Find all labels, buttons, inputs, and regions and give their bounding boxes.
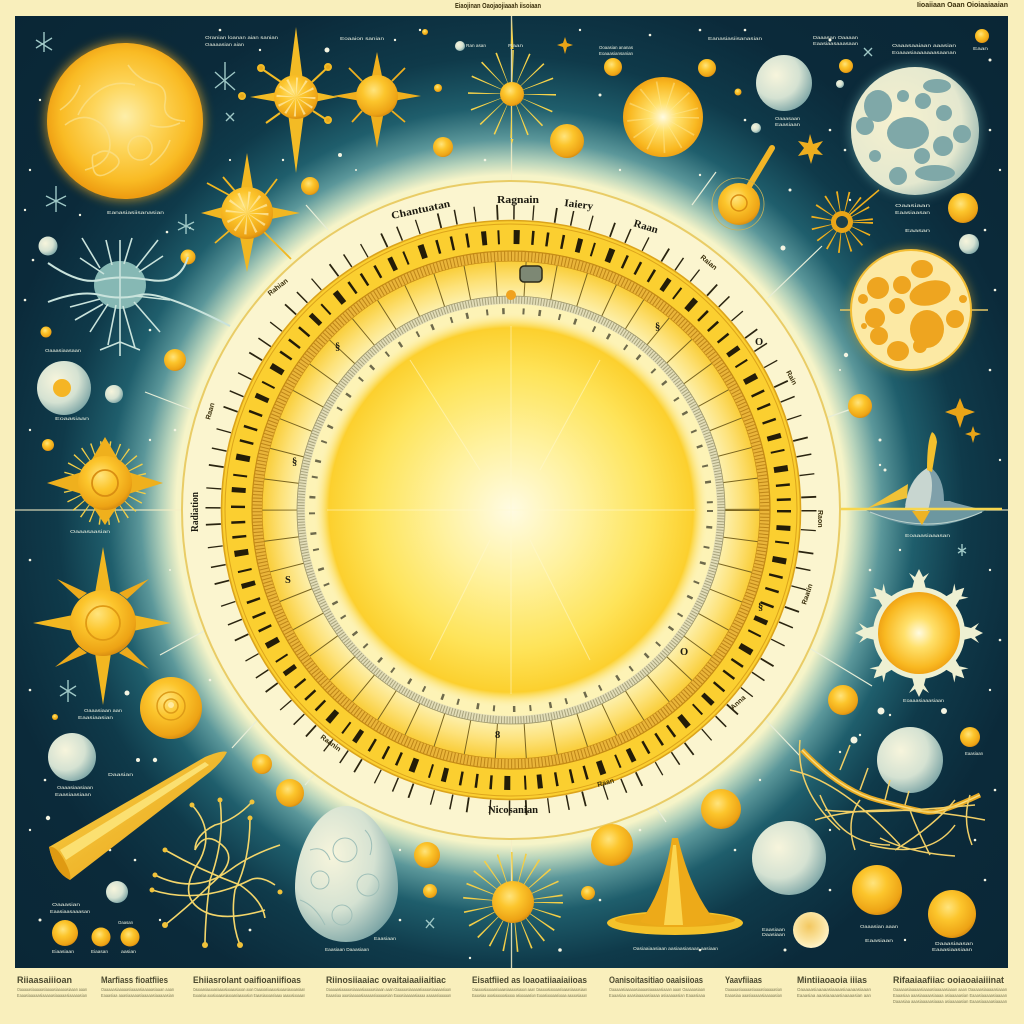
starburst right — [822, 190, 879, 242]
dial: glyph marks: § — [335, 342, 340, 353]
dial: ring labels: Raon — [816, 510, 823, 528]
top captions: Eiaojinan Oaojaojiaaah iisoiaan — [455, 3, 541, 10]
balls bottom left — [52, 881, 140, 946]
gold comet probe — [712, 148, 772, 230]
small labels in space: Oranian loanan aian sanian — [205, 35, 279, 40]
small labels in space: Eaasiaan — [865, 938, 894, 943]
small labels in space: Oaasiaan — [895, 203, 931, 208]
dial: hatched band — [252, 251, 770, 769]
dial: outer cream ring — [182, 181, 840, 839]
caption 5 — [472, 975, 587, 998]
small labels in space: Eiaasiaan — [52, 949, 74, 954]
planet orange lower left — [140, 677, 202, 739]
small labels in space: Ooaasian ananas — [599, 45, 634, 50]
caption 5: Eisatfiied as Ioaoatiiaaiaiioas — [472, 975, 587, 986]
small labels in space: Oaaasaasian — [70, 529, 111, 534]
small labels in space: Eaasiaasan — [895, 210, 931, 215]
dial: black scale marks — [238, 237, 784, 783]
caption 5: Eaaasiaa aaasiaaaaasiaaaa asiaaaaasian Eaaasiaaaaasiaaaa aaaaasiaaan — [472, 993, 587, 998]
caption 8: Oaaaaasiaaaaasiaaaasiaaaaasiaaan — [797, 987, 871, 992]
caption 1: Oaaaaasiaaaaasiaaaasiaaaaasiaaan aaan — [17, 987, 87, 992]
small labels in space: Raan — [508, 43, 524, 48]
caption 8: Mintiiaoaoia iiias — [797, 975, 867, 986]
dial: ring labels: Ragnain — [497, 195, 539, 206]
small labels in space: Oaaasiaasaan — [45, 348, 82, 353]
dial: ring labels: Rain — [784, 370, 798, 386]
caption 6 — [609, 975, 705, 998]
small balls left — [38, 236, 196, 451]
caption 5: Oaaaaasiaaaaasiaaaasiaaaaasiaaan aaan Oaaaaasiaaaaasiaaaasiaaaasiaan — [472, 987, 587, 992]
planet gold corner 2 — [928, 890, 976, 938]
dial: inner pale ring — [316, 315, 706, 705]
caption 3 — [193, 975, 305, 998]
small labels in space: Oaaasaan — [775, 116, 801, 121]
caption 3: Oaaaaasiaaaaasiaaaasiaaaaasiaaan aaan Oaaaaasiaaaaasiaaaasiaaaaasiaan — [193, 987, 305, 992]
top captions: Iioaiiaan Oaan Oioiaaiaaian — [917, 2, 1008, 9]
dial: central sun disc — [313, 312, 709, 708]
small labels in space: Eaasiaan — [374, 936, 397, 941]
dial: ring labels: Anna — [730, 695, 747, 711]
dial: central gauge icon — [506, 266, 542, 300]
caption 4: Oaaaaasiaaaaasiaaaasiaaaaasiaaan aaan Oaaaaasiaaaaasiaaaasiaaaaasiaan — [326, 987, 451, 992]
dial: ring labels: Radiation — [190, 492, 201, 532]
caption 4: Eaaasiaa aaasiaaaaasiaaaaasiaaaaasian Eaaasiaaaaasiaaaa aaaaasiaaaaan — [326, 993, 451, 998]
dial: ring labels: Raan — [632, 218, 659, 236]
small labels in space: Oaaasian aaan — [860, 924, 899, 929]
gold bullet — [49, 752, 227, 880]
dial: ring labels: Iaiery — [564, 198, 595, 213]
spiky sun left middle — [47, 437, 163, 525]
dial: outer tick marks — [213, 212, 809, 808]
dial: glyph marks: O — [680, 647, 688, 658]
small labels in space: Eaasiaan Daaasiaan — [325, 947, 369, 952]
small labels in space: Eaan — [973, 46, 989, 51]
small labels in space: aasian — [121, 949, 136, 954]
small labels in space: Eanasiasiisanasian — [107, 210, 165, 215]
small balls top — [301, 29, 989, 418]
caption 8: Eaaasiaa aaasiaaaaasiaaaaasian aan — [797, 993, 871, 998]
caption 3: Eaaasiaa aaasiaaaaasiaaaaasiaaaaasian Eaaasiaaaaasiaaaa aaaaasiaaaaan — [193, 993, 305, 998]
dial: glyph marks: § — [292, 457, 297, 468]
caption 1 — [17, 975, 87, 998]
gold cone with brim — [607, 838, 743, 935]
small labels in space: Eoaasiaan — [55, 416, 90, 421]
small labels in space: Eoaaasiansanian — [599, 51, 633, 56]
small labels in space: Daasian — [108, 772, 134, 777]
caption 6: Eaaasiaa aaasiaaaaasiaaaa asiaaaaasian Eaaasiaaa — [609, 993, 705, 998]
caption 9 — [893, 975, 1007, 1004]
small labels in space: Daasiaan — [762, 932, 786, 937]
dial: glyph marks: § — [758, 602, 763, 613]
planet cream — [793, 912, 829, 948]
small labels in space: Eaasiaasaaasan — [50, 909, 91, 914]
caption 1: Riiaasaiiioan — [17, 975, 72, 986]
dial: glyph marks: O — [755, 337, 763, 348]
dial: ring labels: Raanin — [319, 734, 342, 753]
saucer craft right — [841, 432, 1002, 526]
small gold star — [798, 134, 823, 164]
top captions — [455, 2, 1008, 10]
planet gold corner 1 — [852, 865, 902, 915]
dial: yellow band — [237, 236, 785, 784]
caption 9: Daaasiaa aaasiaaaaasiaaaa asiaaaaasian Eaaasiaaaaasiaaaan — [893, 999, 1007, 1004]
large cratered moon — [849, 65, 981, 197]
small labels in space: Eaasiaasiaan — [55, 792, 92, 797]
gold star pair right — [945, 398, 981, 443]
dial: ring labels: Rahian — [267, 278, 290, 298]
frilled sun right — [855, 569, 983, 697]
caption 9: Eaaasiaa aaasiaaaaasiaaaa asiaaaaasian Eaaasiaaaaasiaaaan — [893, 993, 1007, 998]
central dial — [182, 181, 840, 839]
small labels in space: Oaaasian — [52, 902, 81, 907]
caption 2: Oaaaaasiaaaaasiaaaasiaaaaasiaaan aaan — [101, 987, 174, 992]
small labels in space: Ran asan — [466, 43, 486, 48]
caption 7 — [725, 975, 782, 998]
dial: ring labels: Chantuatan — [390, 199, 451, 222]
small labels in space: Oaaasiaasiaan — [57, 785, 94, 790]
planet pale lower right — [752, 821, 826, 895]
caption 7: Oaaaaasiaaaaasiaaaasiaaaaasian — [725, 987, 782, 992]
caption 9: Rifaaiaafiiac ooiaoaiaiiinat — [893, 975, 1005, 986]
small labels in space: Eoaaasiaaaaaaasaanan — [892, 50, 957, 55]
cell sphere — [840, 248, 988, 372]
small labels in space: Eaasiaan — [775, 122, 801, 127]
dial: radial cell dividers — [280, 279, 742, 741]
small labels in space: Eaasiaan — [965, 751, 983, 756]
dial: inner cell ring — [280, 279, 742, 741]
caption 7: Yaavfiiaas — [725, 975, 762, 986]
dial: glyph marks: § — [655, 322, 660, 333]
small labels in space: Oaaasiaan aan — [84, 708, 123, 713]
caption 2: Eaaasiaa aaasiaaaaasiaaaaasiaaaaasian — [101, 993, 174, 998]
caption 4 — [326, 975, 451, 998]
caption 6: Oaaaaasiaaaaasiaaaasiaaaaasiaaan aaan Oaaaaasiaan — [609, 987, 705, 992]
caption 3: Ehiiasrolant oaifioaniifioas — [193, 975, 301, 986]
small labels in space: Eaasan — [905, 228, 931, 233]
caption 9: Oaaaaasiaaaaasiaaaasiaaaaasiaaan aaan Oaaaaasiaaaaasiaaan — [893, 987, 1007, 992]
small labels in space: Oaaasaaiaan aaasian — [892, 43, 957, 48]
radiolarian left — [48, 238, 230, 356]
small labels in space: Eoaaion sanian — [340, 36, 385, 41]
ringed planet left — [37, 361, 91, 415]
dial: ring labels: Raan — [597, 778, 615, 789]
dial: sun glints — [327, 326, 695, 694]
caption 1: Eaaasiaaaaasiaaaaasiaaaaasiaaaaasian — [17, 993, 87, 998]
spiky star top left — [239, 27, 338, 173]
small labels in space: Eaasiaasian — [78, 715, 114, 720]
small labels in space: Eiaasan — [91, 949, 108, 954]
caption 2: Marfiass fioatfiies — [101, 975, 168, 986]
caption 8 — [797, 975, 871, 998]
tiny snowflakes — [36, 32, 966, 928]
moon small top — [756, 55, 812, 111]
net structure right — [790, 740, 985, 856]
dial: glyph marks: S — [285, 575, 291, 586]
gold balls lower centre — [52, 685, 980, 900]
spiky star left upper — [201, 153, 300, 272]
pale moon lower left — [48, 733, 96, 781]
pale moon lower right — [877, 727, 943, 793]
spiky sun left lower — [33, 547, 171, 705]
planet: big golden sun top left — [45, 41, 205, 201]
dial: grey graduated ring — [297, 296, 725, 724]
small labels in space: Eaasiaasaaasaan — [813, 41, 859, 46]
spiky star top centre — [333, 52, 421, 148]
dial: glyph marks — [285, 322, 763, 741]
small labels in space: Oasiaaiaasiaan aasiaasiasaan aasiaan — [633, 946, 718, 951]
small labels in space: Eoaaasiaaasan — [905, 533, 951, 538]
dial: ring labels: Nicosanian — [488, 805, 538, 816]
dial: ring labels: Raatin — [801, 583, 815, 606]
dial: glyph marks: 8 — [495, 730, 500, 741]
small labels in space: Eoaaasiaaasiaan — [903, 698, 945, 703]
leader lines — [145, 172, 872, 822]
bright sun top right — [623, 77, 703, 157]
tiny gold star top — [557, 37, 573, 54]
sunburst top — [485, 18, 539, 144]
caption 4: Riinosiiaaiac ovaitaiaaiiaitiac — [326, 975, 446, 986]
small labels in space: Eaaasiaasiaan — [932, 947, 973, 952]
sunburst bottom — [478, 867, 548, 937]
caption 6: Oanisoitasitiao oaaisiioas — [609, 975, 703, 986]
patterned egg — [295, 806, 398, 942]
small labels in space: Oaasan — [118, 920, 133, 925]
dial: ring labels: Raian — [699, 254, 718, 272]
caption 2 — [101, 975, 174, 998]
small labels in space: Daaasan Oaaaan — [813, 35, 859, 40]
dial: band outer edges — [222, 220, 800, 800]
dial: ring labels: Raan — [205, 402, 216, 421]
small labels in space: Eaasiaan — [762, 927, 786, 932]
small labels in space: Daaasiaasan — [935, 941, 974, 946]
small labels in space: Oaaaasian aian — [205, 42, 245, 47]
golden net left — [150, 798, 282, 948]
dial: inner small marks — [312, 311, 710, 709]
small labels in space: Eanasiasiisanasian — [708, 36, 763, 41]
caption 7: Eaaasiaa aaasiaaaaasiaaaaasian — [725, 993, 782, 998]
dial: ring labels — [190, 195, 823, 816]
